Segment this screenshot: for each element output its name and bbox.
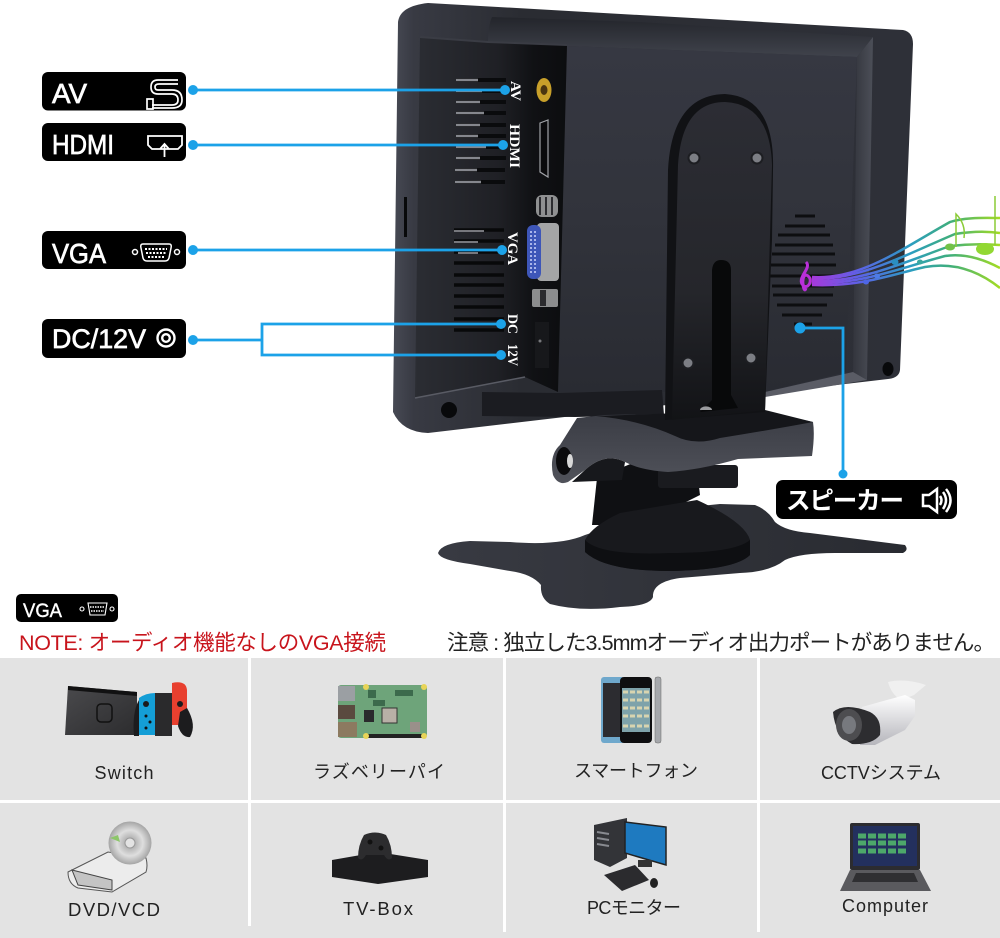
label: AV [42,72,186,110]
tilt bracket [552,412,814,483]
device: Switch: Switch [94,763,154,783]
speaker grille [770,216,836,324]
device: CCTV [821,681,941,783]
printed port names: HDMI [506,124,522,168]
device: smartphone [574,677,698,781]
pedestal [585,500,750,571]
label: speaker [776,480,957,519]
panel: monitor rear view [393,3,913,433]
device: TV-Box: TV-Box [343,898,414,919]
upper vent slits [455,80,506,182]
device: smartphone: スマートフォン [574,761,698,781]
icon: phones [601,677,661,743]
device: DVD [68,822,160,920]
icon: desktop PC [594,818,666,891]
device: Computer: Computer [842,896,928,916]
note: red warning: NOTE: オーディオ機能なしのVGA接続 [19,631,386,655]
device: Raspberry Pi [313,684,445,782]
printed port names: 12V [504,344,520,366]
VGA note badge [16,594,118,622]
label: HDMI: HDMI [52,129,114,160]
icon: small VGA port [80,603,114,615]
printed port names: VGA [504,232,520,265]
printed port names: DC [504,314,520,334]
device: PC monitor [587,818,681,918]
device: DVD: DVD/VCD [68,899,160,920]
device grid panel [0,658,1000,938]
icon: game console and controller [332,832,428,884]
monitor arm [665,94,773,420]
printed port names [504,81,523,366]
icon: AV cable [147,80,182,109]
label: speaker: スピーカー [786,488,904,515]
rear mounting hole right [882,362,894,376]
printed port names: AV [507,81,523,101]
arm screws [682,152,762,368]
icon: CCTV camera [833,681,926,745]
device: Computer [840,823,931,916]
port recess [415,37,567,398]
icon: Raspberry Pi board [338,684,427,739]
icon: HDMI port [148,136,182,157]
icon: laptop [840,823,931,891]
device: TV-Box [332,832,428,919]
tilt knob [556,447,573,475]
base plate [438,504,907,609]
icon: DVD drive [68,822,152,892]
stand [438,410,907,609]
lower vent slits [454,230,504,330]
side slot [404,197,407,237]
note: audio port explanation: 注意 : 独立した3.5mmオーディオ出力ポートがありません。 [447,631,995,655]
port DC 12V [535,322,549,368]
icon: DC jack [158,330,174,346]
icon: speaker [923,489,950,512]
device: Switch [65,682,193,783]
label: DC/12V: DC/12V [52,324,146,354]
label: HDMI [42,123,186,161]
neck [592,460,700,525]
device: Raspberry Pi: ラズベリーパイ [313,762,445,782]
connector lines [193,90,843,474]
device: CCTV: CCTVシステム [821,763,941,783]
device: PC monitor: PCモニター [587,898,681,918]
port AV jack [536,78,552,102]
grid gaps [0,658,1000,932]
icon: VGA port [132,244,180,261]
label: DC/12V [42,319,186,358]
port HDMI [540,120,548,177]
music notes graphic [801,196,1000,290]
VGA note badge: VGA [23,601,62,622]
icon: Switch console [65,682,193,737]
port VGA [527,195,559,307]
connector dots [188,85,848,478]
label: AV: AV [52,78,87,109]
rear mounting hole left [441,402,457,418]
label: VGA: VGA [52,238,106,269]
label: VGA [42,231,186,269]
